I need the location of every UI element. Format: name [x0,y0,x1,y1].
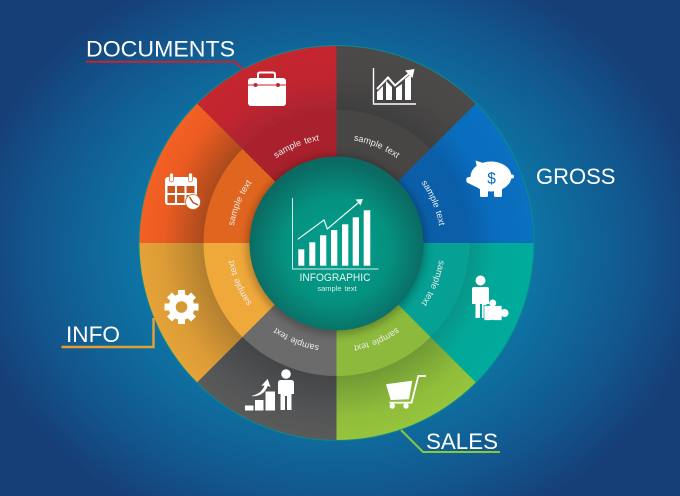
icon: rising chart [374,68,416,104]
ring labels: sample text: sample text [354,328,399,352]
icon: piggy bank [466,160,514,197]
icon: steps and person [245,369,294,410]
ring labels: sample text [228,134,445,352]
icon: shopping cart [386,376,426,409]
segment: calendar orange [140,104,336,243]
inner ring segments [204,110,470,376]
ring labels: sample text: sample text [230,180,252,226]
center chart icon [292,198,378,269]
ring labels: sample text: sample text [274,328,319,350]
center subtitle: sample text [317,284,358,293]
icon: piggy bank: $ [487,170,496,188]
center circle [246,155,426,335]
label: sales: SALES [426,429,498,454]
ring labels: sample text: sample text [228,260,252,306]
segment: gross blue [336,104,534,243]
icon: calendar [165,173,200,210]
segment: info yellow [140,243,336,382]
segment: chart grey [336,46,476,243]
icon: briefcase [248,72,286,106]
label: info: INFO [66,322,120,347]
segment: documents red [197,46,336,243]
center title: INFOGRAPHIC [300,272,371,284]
segment: sales green [336,243,476,440]
ring labels: sample text: sample text [421,260,444,306]
label: documents [86,37,243,70]
segment: growth dark grey [197,243,336,440]
label: documents: DOCUMENTS [86,37,235,62]
segment: puzzle teal [336,243,534,382]
label: info [62,318,154,347]
icon: person with puzzle piece [472,276,508,324]
label: gross: GROSS [536,164,616,189]
ring labels: sample text: sample text [274,134,320,158]
ring labels: sample text: sample text [422,180,445,226]
icon: gear [164,290,198,324]
wheel: outer ring segments [138,45,534,441]
ring labels: sample text: sample text [354,136,400,158]
